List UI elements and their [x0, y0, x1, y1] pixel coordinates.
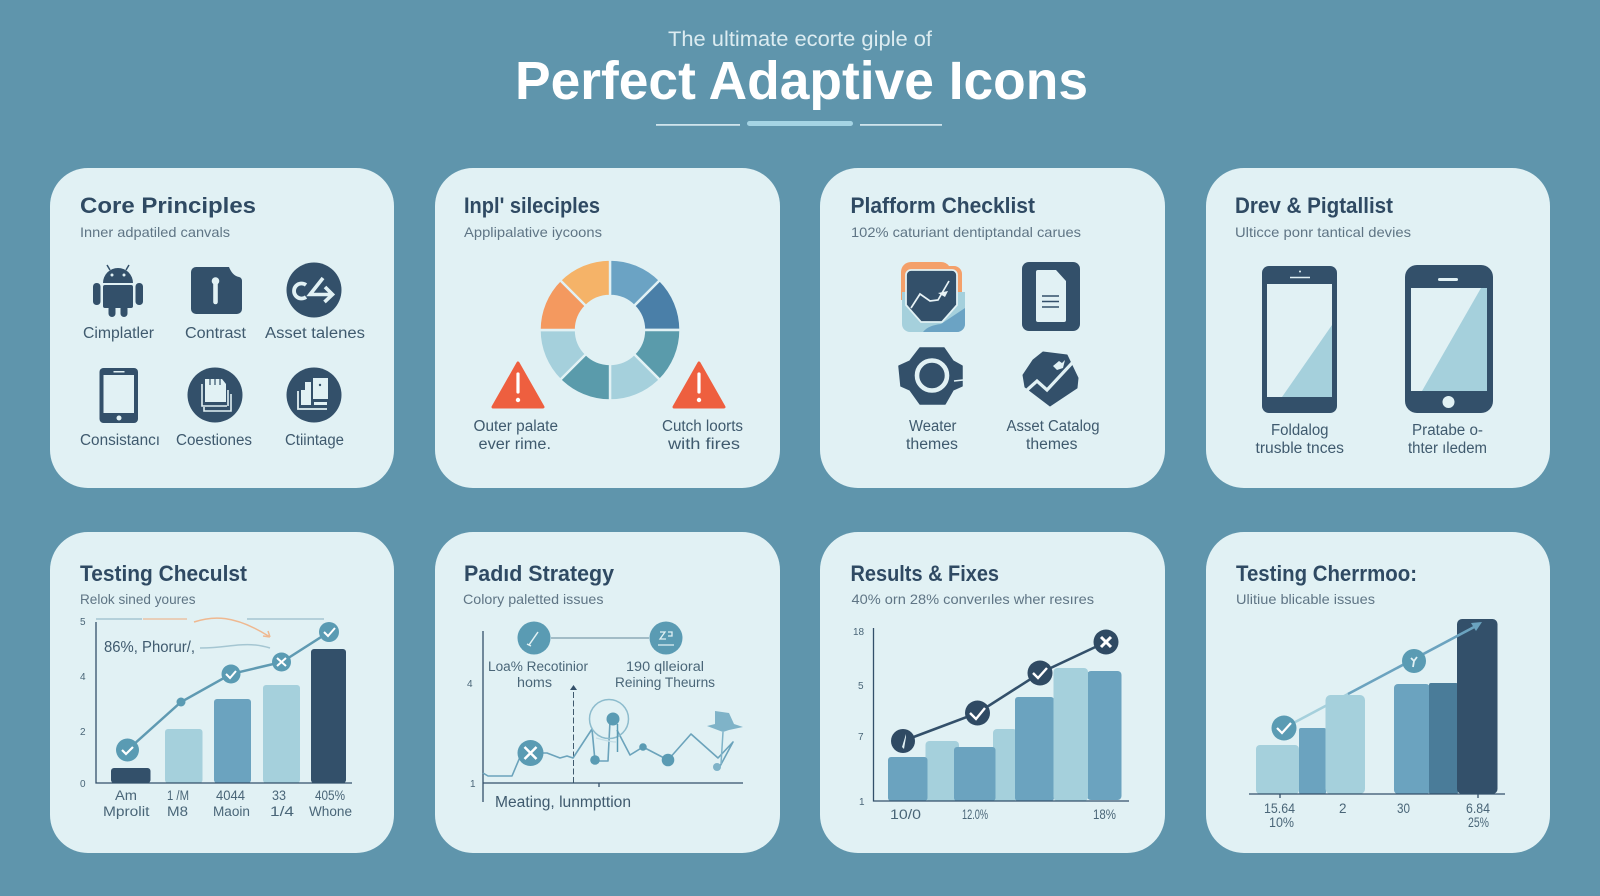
y-axis labels: 1: [470, 779, 476, 790]
connected milestone markers: [518, 622, 682, 654]
bar chart: [1256, 619, 1498, 794]
icon: right warning: [674, 363, 724, 407]
y-axis labels: 4: [80, 672, 86, 683]
subheading: Inner adpatiled canvals: [80, 224, 230, 240]
trend line with markers: [116, 622, 339, 762]
x-axis labels: [103, 788, 352, 819]
left label: [474, 418, 558, 453]
y-axis labels: [80, 617, 86, 790]
label: Asset talenes: [265, 325, 365, 342]
card background: [820, 168, 1165, 488]
icon: contrast tile: [191, 267, 242, 314]
card background: [435, 532, 780, 853]
x-axis labels: Am: [115, 788, 137, 803]
dashed marker arrow: [570, 685, 577, 783]
left label: ever rime.: [478, 436, 551, 453]
x-axis labels: 1 /M: [167, 788, 189, 803]
label: Cimplatler: [83, 325, 154, 342]
icon: book stack: [286, 368, 342, 422]
panel: platform checklist: [820, 168, 1165, 488]
heading: Testing Checulst: [80, 561, 248, 586]
x-axis labels: 10/0: [890, 807, 921, 822]
x-axis labels: 12.0%: [962, 807, 988, 822]
x-axis labels: Mprolit: [103, 804, 150, 819]
axes: [483, 631, 743, 802]
label: Consistancı: [80, 432, 160, 449]
bar chart: [111, 649, 346, 783]
x-axis labels: 405%: [315, 788, 345, 803]
label: Foldalog: [1271, 422, 1328, 439]
heading: Inpl' sileciples: [464, 193, 600, 218]
x-axis labels: [1264, 801, 1490, 830]
panel: testing checklist chart: [50, 532, 394, 853]
x-axis labels: 1/4: [270, 804, 295, 819]
title: Perfect Adaptive Icons: [515, 51, 1088, 111]
x-axis labels: 2: [1339, 801, 1347, 816]
heading: Results & Fixes: [850, 561, 999, 586]
label: trusble tnces: [1256, 440, 1344, 457]
label: [906, 418, 958, 453]
label: [1006, 418, 1100, 453]
panel: palette donut: [435, 168, 780, 488]
x marker: [518, 740, 544, 766]
y-axis labels: 5: [858, 681, 864, 692]
icon: stacked files: [188, 368, 242, 422]
x-axis labels: 18%: [1093, 807, 1116, 822]
trend arrow with markers: [1272, 622, 1482, 740]
icon: layered chart: [901, 262, 965, 332]
card background: [50, 168, 394, 488]
card background: [820, 532, 1165, 853]
card background: [50, 532, 394, 853]
subheading: Applipalative iycoons: [464, 224, 602, 240]
axis caption: Meating, lunmpttion: [495, 794, 631, 811]
icon: chart badge: [1023, 352, 1078, 406]
subheading: Ulticce ponr tantical devies: [1235, 224, 1411, 240]
label: themes: [1026, 436, 1078, 453]
panel: device list: [1206, 168, 1550, 488]
heading: Padıd Strategy: [464, 561, 615, 586]
x-axis labels: Maoin: [213, 804, 250, 819]
label: Asset Catalog: [1006, 418, 1100, 435]
milestone label: 190 qlleioral: [626, 659, 704, 674]
icon: wide phone: [1405, 265, 1493, 413]
y-axis labels: 1: [859, 797, 865, 808]
label: thter ıledem: [1408, 440, 1487, 457]
subheading: Relok sined youres: [80, 591, 196, 607]
x-axis labels: 4044: [216, 788, 245, 803]
subheading: Colory paletted issues: [463, 591, 604, 607]
x-axis labels: 33: [272, 788, 286, 803]
x-axis labels: M8: [167, 804, 188, 819]
label: [1256, 422, 1344, 457]
x-axis labels: 15.64: [1264, 801, 1295, 816]
x-axis labels: 6.84: [1466, 801, 1490, 816]
y-axis labels: [467, 679, 476, 790]
donut chart: [540, 260, 680, 400]
title divider: [656, 121, 942, 126]
heading: Testing Cherrmoo:: [1236, 561, 1417, 586]
milestone label: Loa% Recotinior: [488, 659, 589, 674]
x-axis labels: [890, 807, 1116, 822]
icon: asset circle: [286, 262, 342, 318]
panel: padding strategy chart: [435, 532, 780, 853]
x-axis labels: 30: [1397, 801, 1410, 816]
y-axis labels: 2: [80, 727, 86, 738]
heading: Core Principles: [80, 193, 256, 218]
y-axis labels: 5: [80, 617, 86, 628]
panel: testing chart: [1206, 532, 1550, 853]
milestone label: homs: [517, 675, 552, 690]
card background: [1206, 532, 1550, 853]
subheading: 40% orn 28% converıles wher resıres: [852, 591, 1094, 607]
axis: [1249, 794, 1505, 798]
right label: [662, 418, 743, 453]
y-axis labels: 7: [858, 732, 864, 743]
trend line with markers: [891, 630, 1118, 753]
y-axis labels: [853, 627, 865, 808]
x-axis labels: Whone: [309, 804, 352, 819]
subheading: Ulitiue blicable issues: [1236, 591, 1375, 607]
y-axis labels: 4: [467, 679, 473, 690]
label: Ctiintage: [285, 432, 344, 449]
right label: Cutch loorts: [662, 418, 743, 435]
icon: watch gear: [899, 348, 963, 404]
subheading: 102% caturiant dentiptandal carues: [851, 224, 1081, 240]
top orange trend arrow: [96, 618, 324, 637]
card background: [435, 168, 780, 488]
icon: left warning: [493, 363, 543, 407]
eyebrow text: The ultimate ecorte giple of: [668, 28, 932, 51]
icon: document: [1022, 262, 1080, 331]
x-axis labels: 25%: [1468, 815, 1489, 830]
icon: tall phone: [1262, 266, 1337, 413]
bar chart: [888, 668, 1122, 801]
y-axis labels: 18: [853, 627, 865, 638]
label: Coestiones: [176, 432, 252, 449]
heading: Drev & Pigtallist: [1235, 193, 1394, 218]
label: Contrast: [185, 325, 247, 342]
header: [515, 28, 1088, 126]
icon: android: [93, 265, 143, 317]
y-axis labels: 0: [80, 779, 86, 790]
axes: [874, 628, 1129, 801]
panel: core principles: [50, 168, 394, 488]
annotation squiggle: [200, 645, 270, 648]
x-axis labels: 10%: [1269, 815, 1294, 830]
panel: results and fixes chart: [820, 532, 1165, 853]
label: Pratabe o-: [1412, 422, 1483, 439]
label: themes: [906, 436, 958, 453]
wave line chart: [483, 700, 743, 776]
milestone label: [615, 659, 715, 690]
label: Weater: [909, 418, 956, 435]
heading: Plafform Checklist: [850, 193, 1036, 218]
milestone label: [488, 659, 589, 690]
icon: phone: [100, 368, 138, 423]
right label: with fires: [667, 436, 740, 453]
axes: [96, 622, 352, 783]
annotation: 86%, Phorur/,: [104, 639, 195, 656]
card background: [1206, 168, 1550, 488]
label: [1408, 422, 1487, 457]
milestone label: Reining Theurns: [615, 675, 715, 690]
left label: Outer palate: [474, 418, 558, 435]
